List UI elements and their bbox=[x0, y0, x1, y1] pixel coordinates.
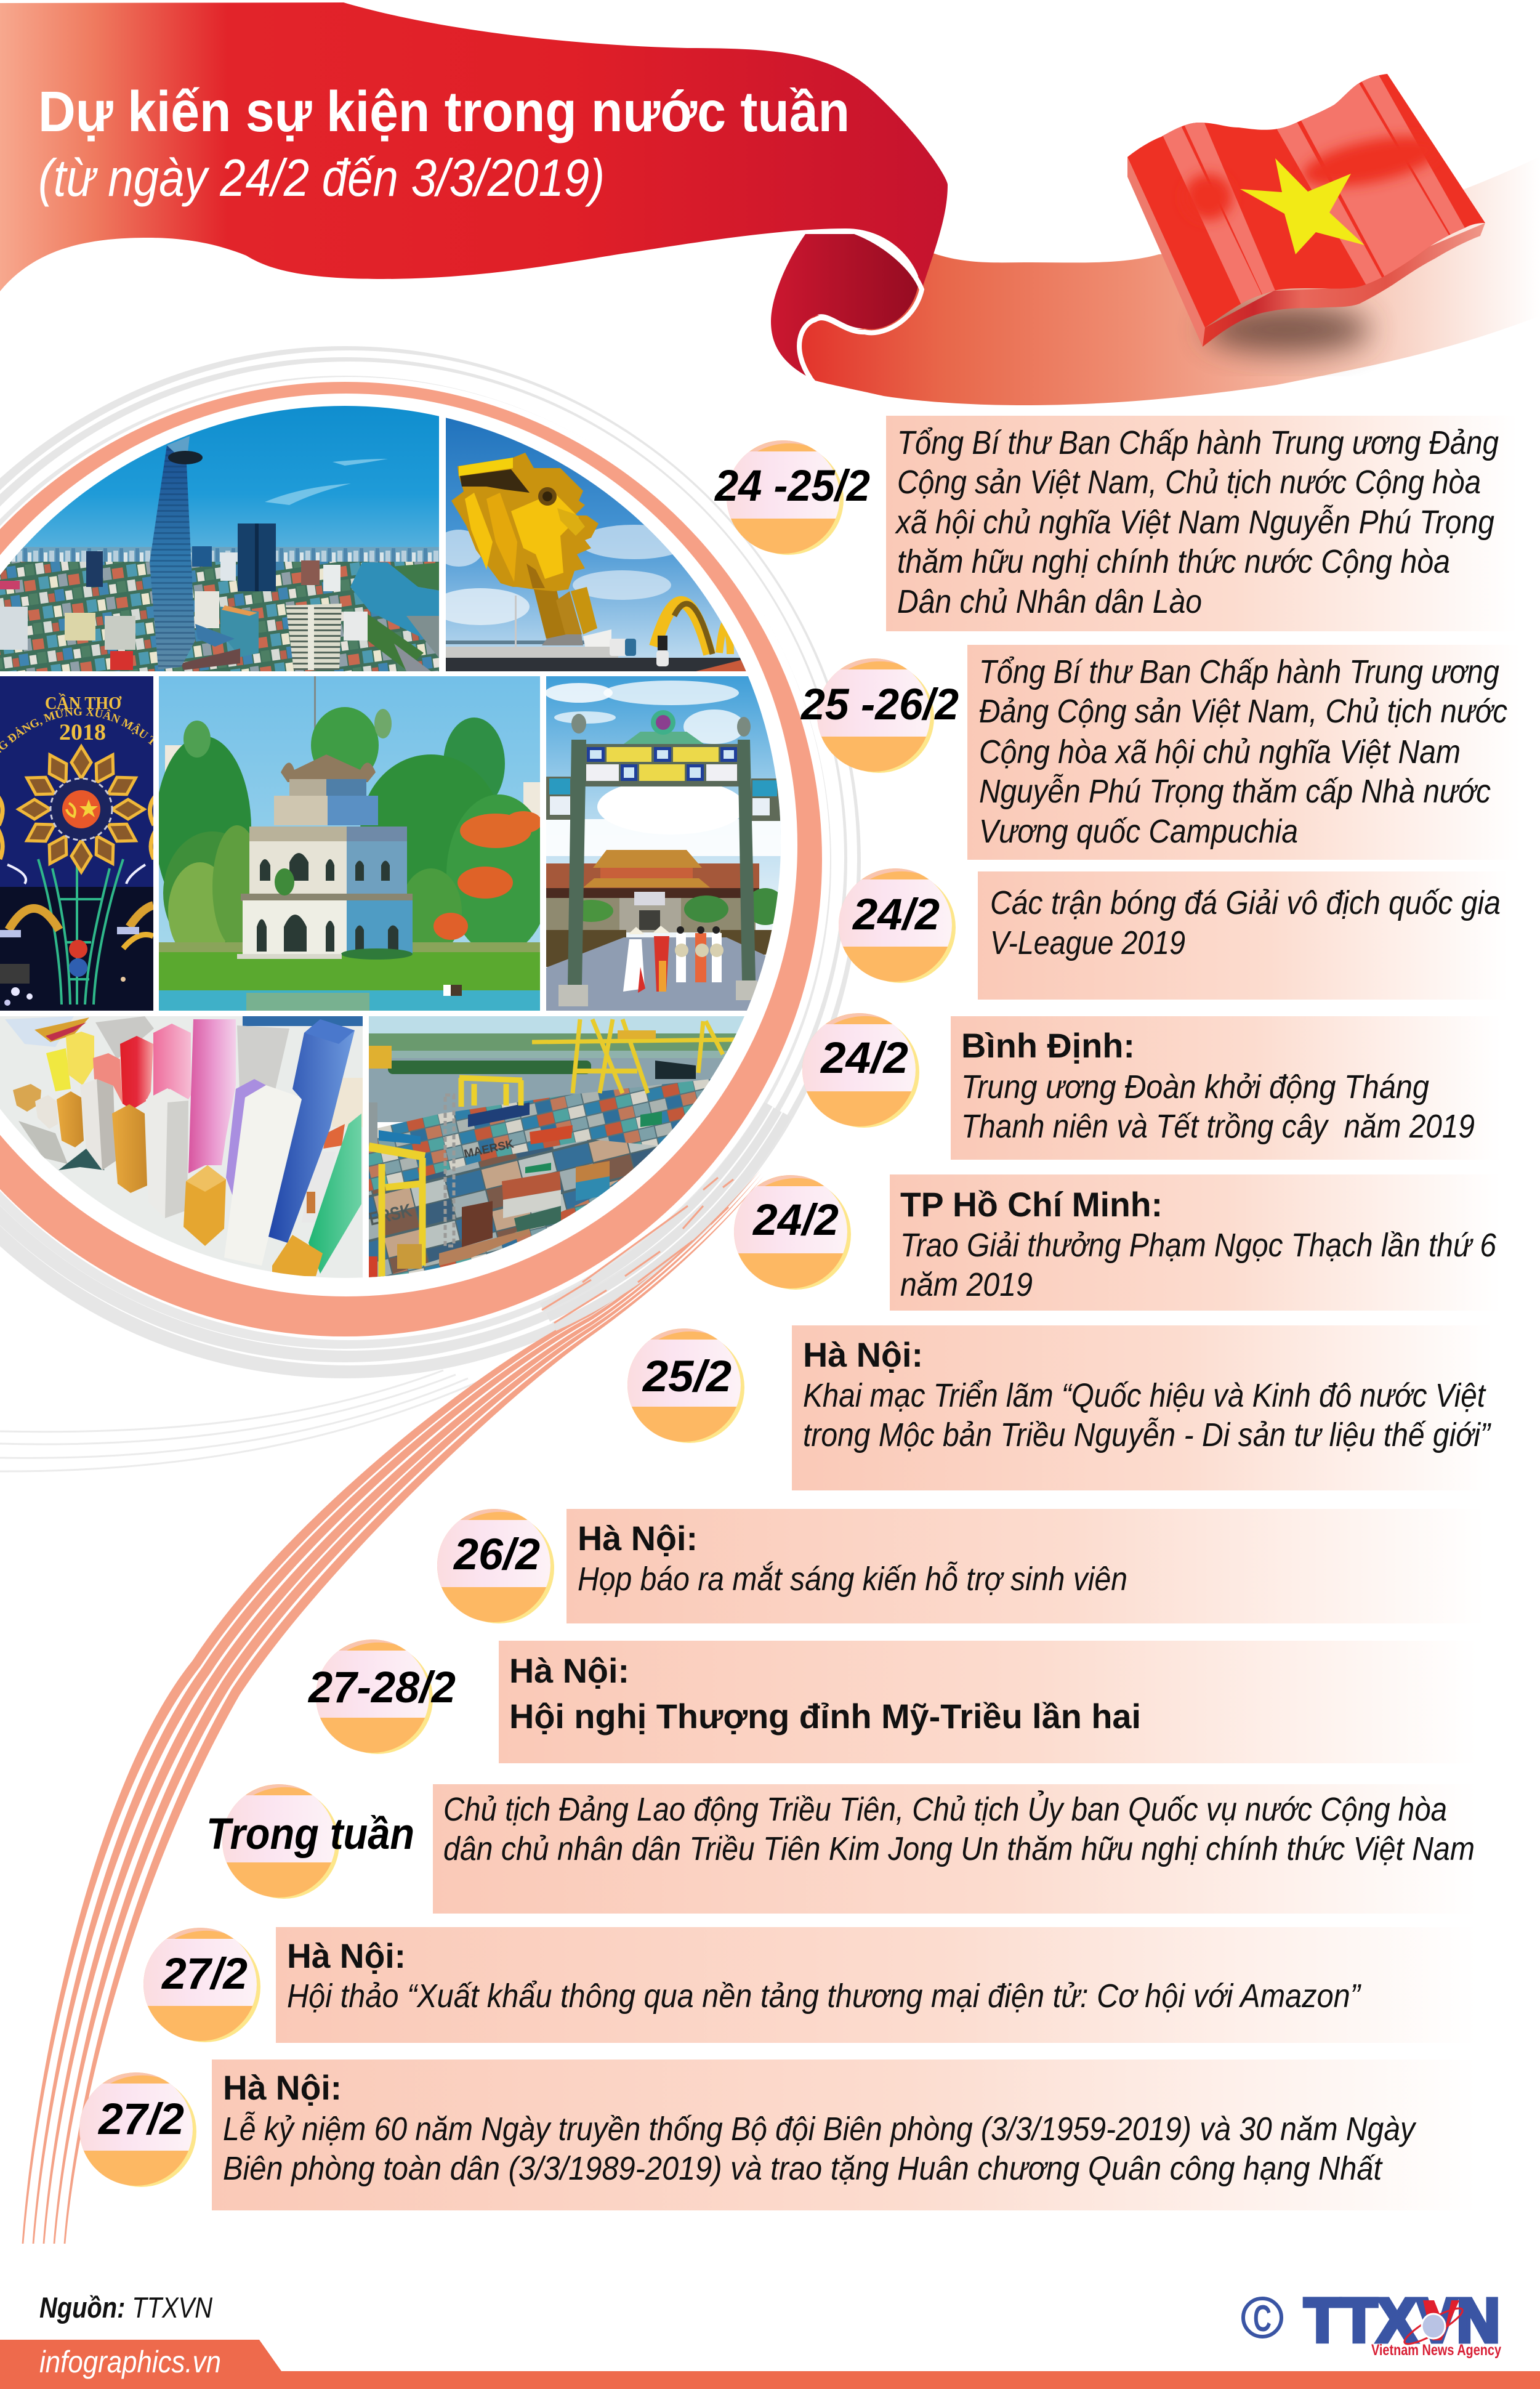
event text panel: Hội thảo “Xuất khẩu thông qua nền tảng thương mại điện tử: Cơ hội với Amazon” bbox=[287, 1978, 1361, 2015]
photo: Can Tho night decoration bbox=[0, 676, 153, 1011]
date bubble: 24/2 bbox=[820, 1034, 908, 1083]
event row 8 bbox=[307, 1639, 1478, 1763]
event text panel: Trung ương Đoàn khởi động Tháng bbox=[961, 1069, 1429, 1106]
event text panel: Hà Nội: bbox=[287, 1936, 406, 1975]
lower ribbon tail bbox=[797, 156, 1540, 405]
footer website: infographics.vn bbox=[39, 2345, 221, 2379]
event text panel bbox=[212, 2060, 1478, 2210]
event text panel bbox=[890, 1174, 1501, 1311]
event text panel: Hà Nội: bbox=[803, 1335, 923, 1374]
event row 5 bbox=[733, 1174, 1501, 1311]
title: Dự kiến sự kiện trong nước tuần bbox=[38, 79, 850, 144]
date bubble: Trong tuần bbox=[206, 1810, 414, 1859]
photo: container port: ERSK bbox=[367, 1200, 414, 1230]
event text panel bbox=[886, 416, 1517, 631]
TTXVN logo: Vietnam News Agency bbox=[1371, 2342, 1501, 2359]
date bubble bbox=[714, 440, 870, 555]
event row 11 bbox=[78, 2060, 1478, 2210]
date bubble bbox=[801, 1013, 919, 1128]
event text panel bbox=[951, 1016, 1501, 1160]
photo: city skyline bbox=[0, 394, 443, 671]
icon: copyright: C bbox=[1253, 2298, 1272, 2339]
subtitle: (từ ngày 24/2 đến 3/3/2019) bbox=[38, 149, 605, 208]
event text panel: Lễ kỷ niệm 60 năm Ngày truyền thống Bộ đội Biên phòng (3/3/1959-2019) và 30 năm Ngày bbox=[223, 2111, 1417, 2148]
event text panel bbox=[499, 1641, 1478, 1763]
event text panel: Hà Nội: bbox=[578, 1519, 698, 1558]
event row 7 bbox=[436, 1509, 1485, 1623]
photo: Turtle Tower, Hoan Kiem lake bbox=[155, 676, 551, 1013]
event text panel: Biên phòng toàn dân (3/3/1989-2019) và trao tặng Huân chương Quân công hạng Nhất bbox=[223, 2150, 1383, 2187]
flag shadow bbox=[1204, 306, 1370, 353]
photo: 3D bar chart bbox=[0, 1016, 363, 1281]
event text panel: Bình Định: bbox=[961, 1026, 1135, 1065]
event text panel: Vương quốc Campuchia bbox=[979, 813, 1298, 850]
photo: Can Tho night decoration: CẦN THƠ bbox=[45, 692, 122, 713]
event text panel: thăm hữu nghị chính thức nước Cộng hòa bbox=[897, 543, 1450, 580]
date bubble bbox=[78, 2072, 196, 2187]
source credit: Nguồn: TTXVN bbox=[39, 2291, 212, 2324]
photo: Can Tho night decoration: 2018 bbox=[59, 720, 106, 745]
salmon swoosh strands bbox=[22, 1164, 764, 2244]
photo: Dragon Bridge bbox=[446, 418, 746, 671]
event text panel bbox=[967, 645, 1521, 860]
event row 2 bbox=[800, 645, 1521, 860]
icon: copyright bbox=[1243, 2298, 1281, 2339]
TTXVN logo: TTXVN bbox=[1304, 2286, 1500, 2355]
event row 6 bbox=[626, 1325, 1493, 1490]
event text panel: Hà Nội: bbox=[223, 2068, 342, 2107]
date bubble bbox=[436, 1509, 554, 1623]
event text panel: Dân chủ Nhân dân Lào bbox=[897, 583, 1202, 620]
photo: container port bbox=[369, 1016, 744, 1277]
date bubble: 26/2 bbox=[453, 1530, 540, 1579]
date bubble bbox=[626, 1328, 744, 1443]
photo collage circle bbox=[0, 406, 815, 1290]
date bubble: 24/2 bbox=[752, 1196, 839, 1245]
gray concentric rings bbox=[0, 346, 861, 1471]
ribbon dark fold bbox=[771, 234, 918, 378]
event text panel: TP Hồ Chí Minh: bbox=[900, 1185, 1163, 1224]
date bubble bbox=[142, 1928, 260, 2042]
event row 4 bbox=[801, 1013, 1501, 1160]
date bubble bbox=[206, 1784, 414, 1899]
photo: container port: MAERSK bbox=[463, 1138, 515, 1161]
date bubble: 24/2 bbox=[852, 891, 940, 939]
event text panel: Hà Nội: bbox=[509, 1651, 629, 1690]
event row 10 bbox=[142, 1927, 1478, 2043]
date bubble bbox=[307, 1639, 456, 1754]
icon: Vietnam flag bbox=[1127, 73, 1485, 353]
date bubble: 27-28/2 bbox=[307, 1663, 456, 1712]
date bubble: 27/2 bbox=[97, 2095, 184, 2144]
date bubble: 27/2 bbox=[161, 1950, 248, 1999]
header ribbon bbox=[0, 2, 1540, 405]
event text panel: Họp báo ra mắt sáng kiến hỗ trợ sinh viên bbox=[578, 1561, 1127, 1598]
photo: Hue imperial city gate bbox=[545, 676, 792, 1013]
event text panel bbox=[566, 1509, 1485, 1623]
date bubble bbox=[733, 1175, 851, 1290]
event text panel bbox=[276, 1927, 1478, 2043]
date bubble: 25/2 bbox=[642, 1352, 732, 1401]
event row 1 bbox=[714, 416, 1517, 631]
date bubble bbox=[800, 658, 959, 773]
event text panel: Cộng hòa xã hội chủ nghĩa Việt Nam bbox=[979, 734, 1461, 770]
salmon crescent ring around photos bbox=[0, 382, 822, 1336]
event text panel bbox=[792, 1325, 1493, 1490]
event text panel: Hội nghị Thượng đỉnh Mỹ-Triều lần hai bbox=[509, 1697, 1141, 1736]
date bubble: 25 -26/2 bbox=[800, 681, 959, 729]
flag star bbox=[1240, 158, 1365, 254]
event text panel: V-League 2019 bbox=[990, 924, 1185, 961]
event text panel: Thanh niên và Tết trồng cây năm 2019 bbox=[961, 1108, 1475, 1145]
event row 3 bbox=[837, 868, 1508, 1000]
gray bands over swoosh, lower right bbox=[542, 1104, 787, 1327]
event text panel bbox=[433, 1784, 1478, 1914]
event text panel: năm 2019 bbox=[900, 1266, 1033, 1303]
ribbon fold outline bbox=[799, 232, 922, 378]
footer bar bbox=[0, 2340, 1540, 2389]
event row 9 bbox=[206, 1784, 1478, 1914]
event text panel bbox=[978, 871, 1508, 1000]
date bubble bbox=[837, 868, 956, 983]
date bubble: 24 -25/2 bbox=[714, 462, 870, 511]
main red ribbon bbox=[0, 2, 948, 291]
